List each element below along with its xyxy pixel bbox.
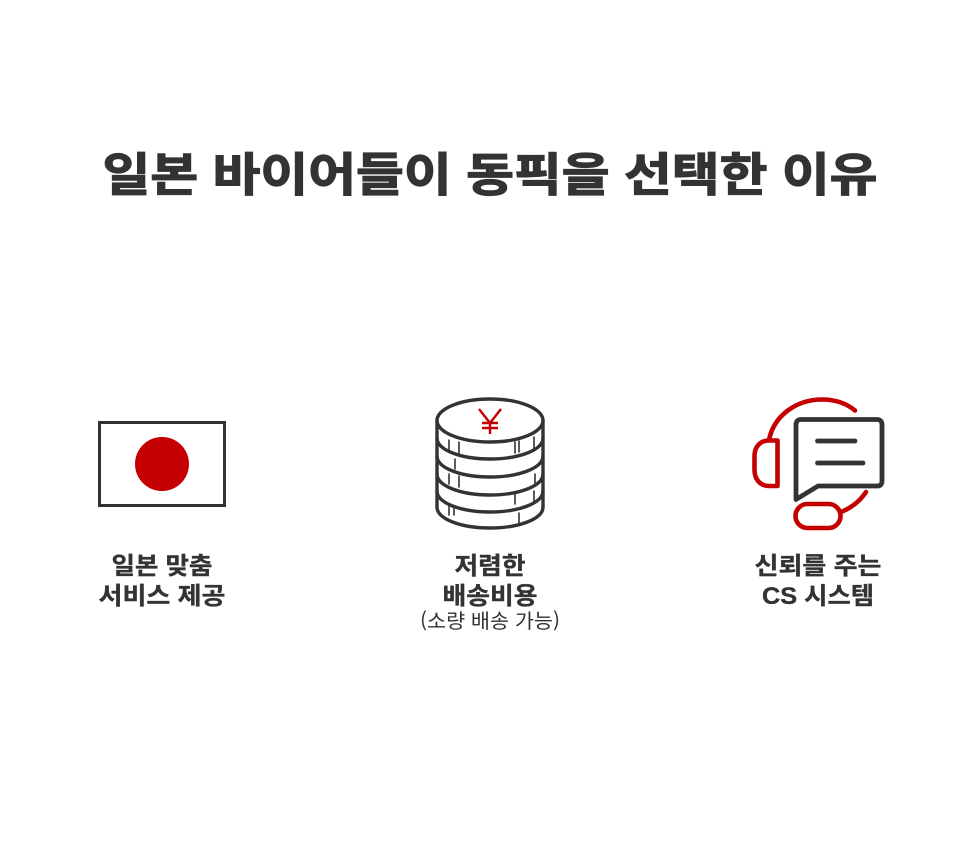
label: trusted CS system [754, 553, 882, 610]
label: low shipping cost: 저렴한 [454, 553, 526, 580]
panel: low shipping cost [420, 399, 560, 634]
note: small quantity shipping available: (소량 배송 가능) [420, 605, 560, 634]
label: Japan custom service [98, 553, 226, 610]
panel: Japan custom service [98, 422, 226, 610]
label: Japan custom service: 일본 맞춤 [112, 553, 212, 580]
label: low shipping cost [442, 553, 538, 610]
title: 일본 바이어들이 동픽을 선택한 이유 [102, 149, 878, 201]
label: low shipping cost: 배송비용 [442, 583, 538, 610]
icon: yen symbol [479, 409, 501, 434]
icon: Japanese flag [100, 422, 224, 506]
icon: headset with speech bubble [754, 400, 882, 528]
icon: yen coin stack [437, 399, 543, 528]
panel: trusted CS system [754, 400, 882, 610]
label: trusted CS system: CS 시스템 [762, 583, 874, 610]
label: trusted CS system: 신뢰를 주는 [754, 553, 882, 580]
label: Japan custom service: 서비스 제공 [98, 583, 226, 610]
